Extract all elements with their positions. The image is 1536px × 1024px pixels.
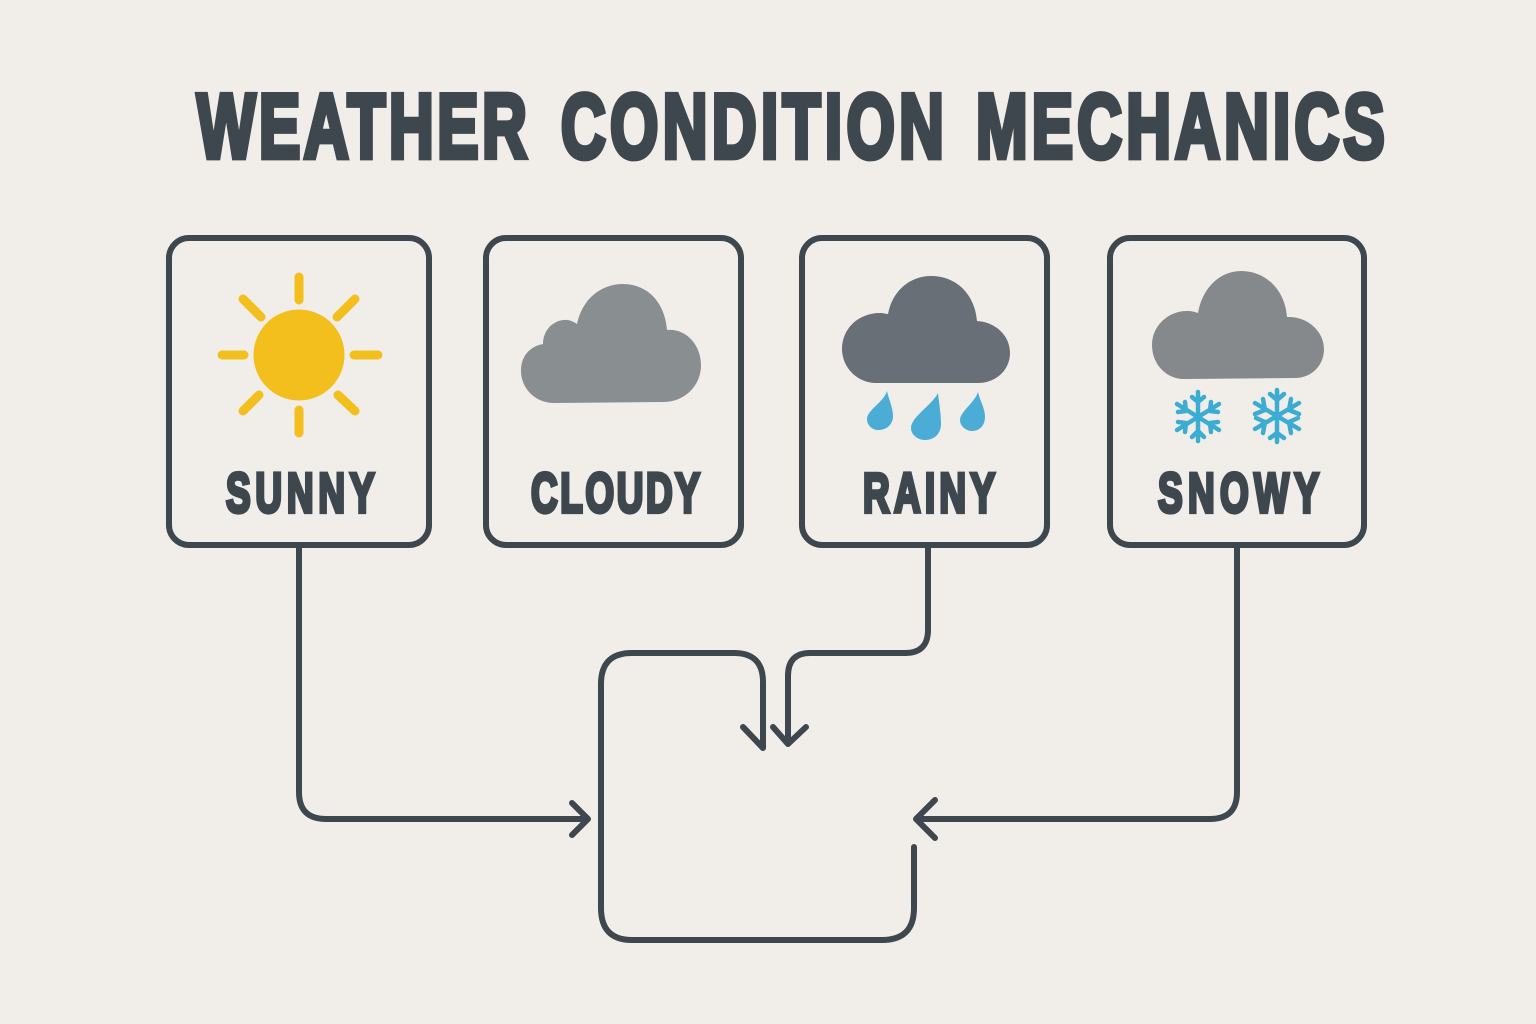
arrow: central loop (601, 653, 914, 940)
label: rainy: RAINY (863, 462, 995, 525)
label: snowy: SNOWY (1158, 462, 1319, 525)
snow cloud shape (1152, 271, 1324, 379)
title: CONDITION (561, 77, 944, 177)
title (197, 77, 1385, 177)
panel: rainy (802, 238, 1047, 545)
icon: cloud (521, 284, 701, 403)
arrow: sunny to center (299, 546, 588, 835)
panel: sunny (169, 238, 429, 545)
label: sunny: SUNNY (226, 462, 375, 525)
label: cloudy: CLOUDY (531, 462, 700, 525)
arrow: snowy to center (916, 546, 1237, 838)
rain drops (867, 391, 985, 440)
snowflakes (1177, 390, 1299, 442)
panel: cloudy (486, 238, 741, 545)
panel: snowy (1110, 238, 1364, 545)
rain cloud shape (842, 276, 1010, 383)
title: MECHANICS (976, 77, 1385, 177)
icon: sun (222, 277, 378, 433)
title: WEATHER (197, 77, 527, 177)
icon: snow cloud (1152, 271, 1324, 442)
arrow: rainy to center (773, 546, 928, 744)
icon: rain cloud (842, 276, 1010, 440)
